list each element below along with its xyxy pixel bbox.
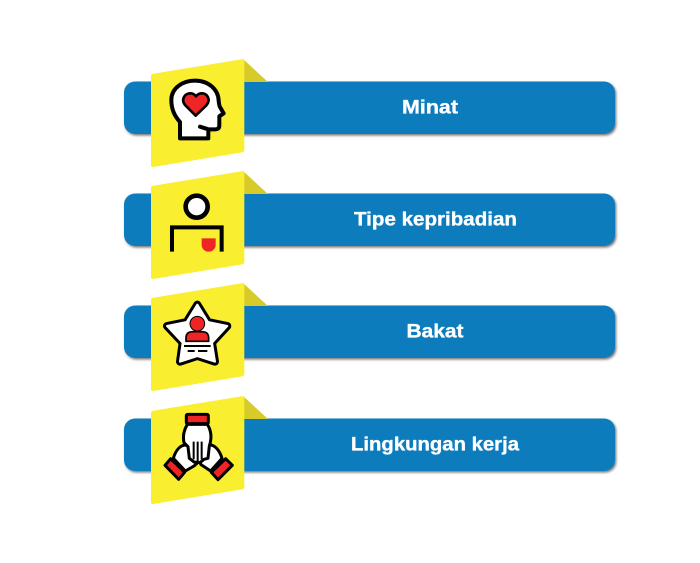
blue bar [124, 82, 615, 134]
blue bar [124, 418, 615, 471]
folded corner [243, 171, 268, 194]
yellow tag [151, 283, 244, 391]
folded corner [243, 396, 268, 419]
icon: star with person [167, 305, 227, 362]
label: Lingkungan kerja [351, 434, 519, 456]
panel: Minat [124, 59, 615, 167]
folded corner [243, 283, 268, 306]
icon: head with heart [171, 81, 224, 138]
yellow tag [151, 396, 244, 504]
folded corner [243, 59, 268, 82]
panel: Lingkungan kerja [124, 396, 615, 504]
yellow tag [151, 171, 244, 279]
icon: person with pocket [172, 196, 222, 252]
icon: stacked hands [165, 414, 232, 480]
blue bar [124, 306, 615, 358]
panel: Bakat [124, 283, 615, 391]
panel: Tipe kepribadian [124, 171, 615, 279]
blue bar [124, 194, 615, 246]
label: Tipe kepribadian [354, 208, 517, 230]
label: Bakat [406, 320, 464, 342]
label: Minat [402, 96, 459, 118]
yellow tag [151, 59, 244, 167]
